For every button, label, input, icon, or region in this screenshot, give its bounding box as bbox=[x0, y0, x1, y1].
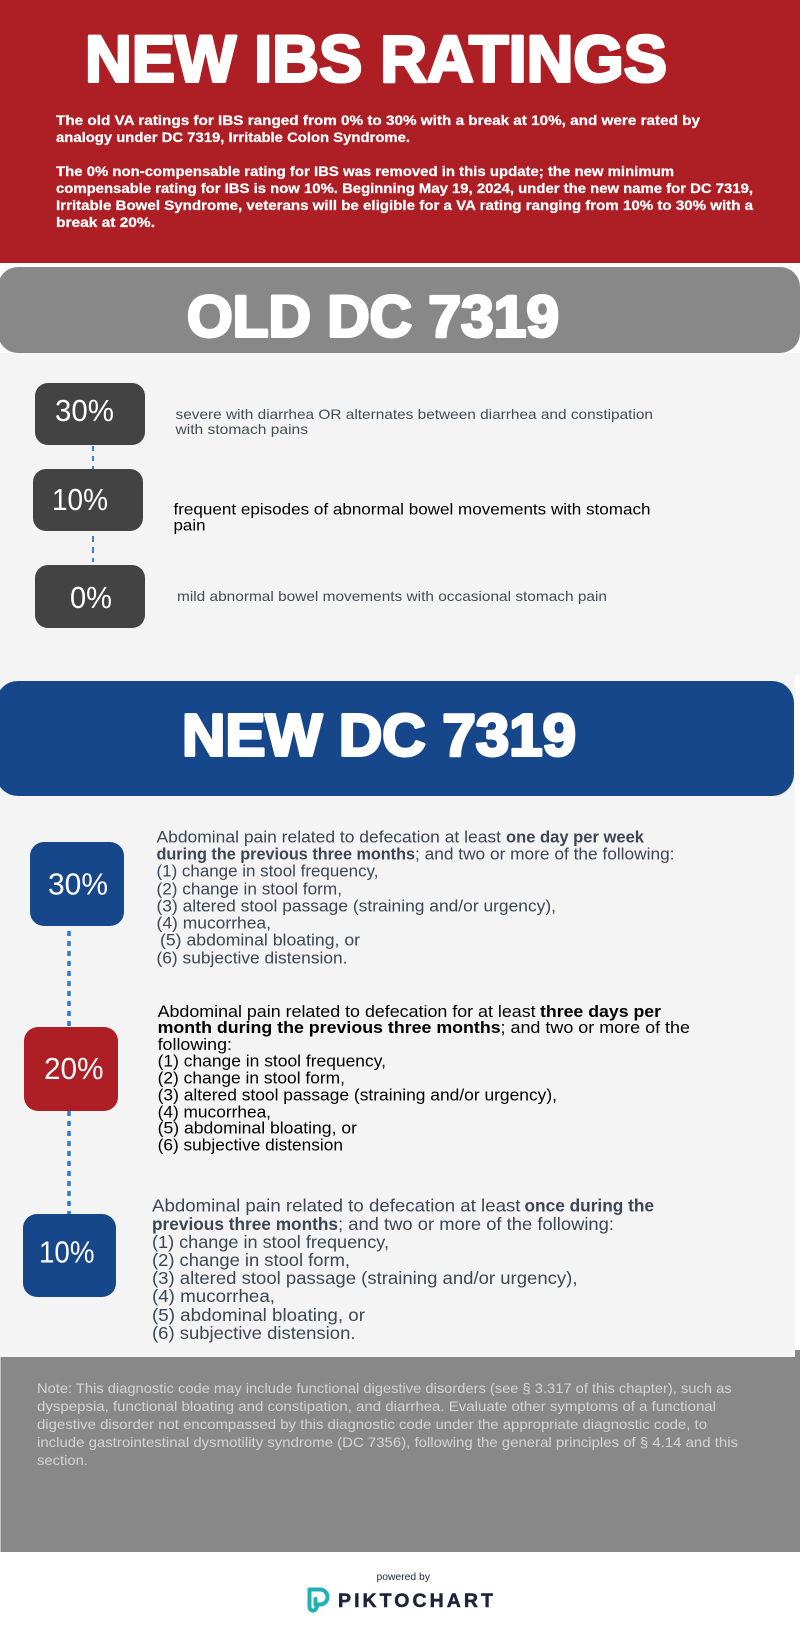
text block: new 20% criteria: ; and two or more of the bbox=[500, 1019, 690, 1037]
text block: new 10% criteria: (6) subjective distension. bbox=[152, 1323, 356, 1343]
text block: new 30% criteria: (3) altered stool passage (straining and/or urgency), bbox=[156, 898, 556, 916]
text block: new 20% criteria: (6) subjective distension bbox=[158, 1136, 343, 1154]
connector: old 10 to 0 bbox=[92, 536, 94, 562]
text: old 30% description bbox=[174, 406, 653, 437]
footer: powered by Piktochart: PIKTOCHART bbox=[338, 1590, 493, 1612]
text block: intro: compensable rating for IBS is now 10%. Beginning May 19, 2024, under the new name for DC 7319, bbox=[56, 180, 753, 196]
text block: new 10% criteria: ; and two or more of the following: bbox=[338, 1214, 614, 1234]
connector: old 30 to 10 bbox=[92, 446, 94, 469]
rating: old 0%: 0% bbox=[70, 580, 112, 615]
text block: new 20% criteria: (5) abdominal bloating, or bbox=[158, 1120, 358, 1138]
panel: header bbox=[0, 0, 800, 263]
rating: old 30%: 30% bbox=[55, 393, 114, 428]
text block: intro: break at 20%. bbox=[56, 214, 155, 230]
heading band: new DC 7319: NEW DC 7319 bbox=[182, 702, 576, 768]
text block: new 10% criteria: (1) change in stool frequency, bbox=[152, 1232, 389, 1252]
text: old 30% description: severe with diarrhea OR alternates between diarrhea and constipation bbox=[176, 406, 653, 422]
rating: old 30% bbox=[35, 383, 145, 445]
text block: new 20% criteria: following: bbox=[158, 1036, 232, 1054]
text block: new 30% criteria: ; and two or more of the following: bbox=[415, 846, 674, 864]
text block: new 30% criteria: one day per week bbox=[506, 828, 645, 846]
rating: new 30% bbox=[30, 842, 124, 926]
text block: new 10% criteria: (4) mucorrhea, bbox=[152, 1286, 275, 1306]
text: old 30% description: with stomach pains bbox=[174, 421, 308, 437]
text block: new 10% criteria: (5) abdominal bloating, or bbox=[152, 1305, 365, 1325]
text block: note: section. bbox=[37, 1452, 88, 1468]
text block: new 20% criteria: (3) altered stool passage (straining and/or urgency), bbox=[158, 1086, 557, 1104]
text block: new 20% criteria: (4) mucorrhea, bbox=[158, 1104, 271, 1122]
heading band: old DC 7319: OLD DC 7319 bbox=[187, 284, 559, 350]
panel: note bbox=[0, 1357, 800, 1552]
icon: Piktochart logo bbox=[309, 1590, 328, 1611]
connector: new 30 to 20 bbox=[67, 931, 71, 1027]
footer: powered by Piktochart bbox=[309, 1571, 493, 1612]
text block: new 10% criteria: (3) altered stool passage (straining and/or urgency), bbox=[152, 1268, 578, 1288]
text block: new 10% criteria: previous three months bbox=[152, 1214, 338, 1234]
text block: note bbox=[37, 1380, 738, 1468]
heading band: new DC 7319 bbox=[0, 681, 794, 796]
text block: new 20% criteria: three days per bbox=[540, 1003, 662, 1021]
rating: new 20% bbox=[24, 1027, 118, 1111]
text block: note: include gastrointestinal dysmotility syndrome (DC 7356), following the general principles of § 4.14 and this bbox=[37, 1434, 738, 1450]
rating: new 30%: 30% bbox=[48, 866, 108, 902]
text block: new 20% criteria: (2) change in stool form, bbox=[158, 1070, 345, 1088]
rating: new 20%: 20% bbox=[44, 1051, 104, 1086]
text block: new 30% criteria: (6) subjective distension. bbox=[156, 950, 348, 968]
text block: new 20% criteria: Abdominal pain related to defecation for at least bbox=[158, 1003, 536, 1021]
text block: new 30% criteria: (5) abdominal bloating, or bbox=[160, 932, 361, 950]
text block: new 30% criteria: Abdominal pain related to defecation at least bbox=[156, 828, 501, 846]
connector: new 20 to 10 bbox=[67, 1111, 71, 1214]
text block: note: digestive disorder not encompassed by this diagnostic code under the appropriate diagnostic code, to bbox=[37, 1416, 707, 1432]
rating: new 10%: 10% bbox=[39, 1234, 94, 1270]
text block: intro: Irritable Bowel Syndrome, veterans will be eligible for a VA rating ranging from 10% to 30% with a bbox=[56, 197, 753, 213]
text: old 10% description: frequent episodes of abnormal bowel movements with stomach bbox=[174, 502, 650, 518]
text block: intro: The 0% non-compensable rating for IBS was removed in this update; the new minimum bbox=[56, 163, 674, 179]
text block: new 10% criteria: once during the bbox=[524, 1196, 654, 1216]
title: NEW IBS RATINGS bbox=[85, 22, 667, 96]
text block: new 10% criteria: (2) change in stool form, bbox=[152, 1250, 350, 1270]
rating: old 10% bbox=[33, 469, 143, 531]
text block: new 30% criteria: (4) mucorrhea, bbox=[156, 914, 271, 932]
text block: new 30% criteria bbox=[156, 828, 674, 968]
text block: new 10% criteria bbox=[152, 1196, 654, 1343]
text: old 0% description: mild abnormal bowel movements with occasional stomach pain bbox=[177, 588, 607, 604]
rating: old 0% bbox=[35, 565, 145, 628]
text block: new 20% criteria bbox=[158, 1003, 690, 1154]
footer: powered by Piktochart: powered by bbox=[376, 1571, 431, 1583]
text block: intro: The old VA ratings for IBS ranged from 0% to 30% with a break at 10%, and were rated by bbox=[56, 112, 700, 128]
text block: new 10% criteria: Abdominal pain related to defecation at least bbox=[152, 1196, 521, 1216]
text block: new 30% criteria: (2) change in stool form, bbox=[156, 880, 342, 898]
text block: new 20% criteria: month during the previous three months bbox=[158, 1019, 501, 1037]
text block: intro: analogy under DC 7319, Irritable Colon Syndrome. bbox=[56, 129, 410, 145]
text block: new 30% criteria: (1) change in stool frequency, bbox=[156, 862, 378, 880]
rating: old 10%: 10% bbox=[52, 482, 108, 517]
heading band: old DC 7319 bbox=[0, 267, 800, 353]
text block: note: Note: This diagnostic code may include functional digestive disorders (see § 3.317 of this chapter), such as bbox=[37, 1380, 732, 1396]
text block: new 20% criteria: (1) change in stool frequency, bbox=[158, 1052, 386, 1070]
text: old 10% description: pain bbox=[174, 518, 206, 534]
text block: intro bbox=[56, 112, 753, 230]
text block: new 30% criteria: during the previous three months bbox=[156, 846, 415, 864]
text block: note: dyspepsia, functional bloating and constipation, and diarrhea. Evaluate other symptoms of a functional bbox=[37, 1398, 716, 1414]
rating: new 10% bbox=[23, 1214, 116, 1297]
text: old 10% description bbox=[174, 502, 650, 534]
